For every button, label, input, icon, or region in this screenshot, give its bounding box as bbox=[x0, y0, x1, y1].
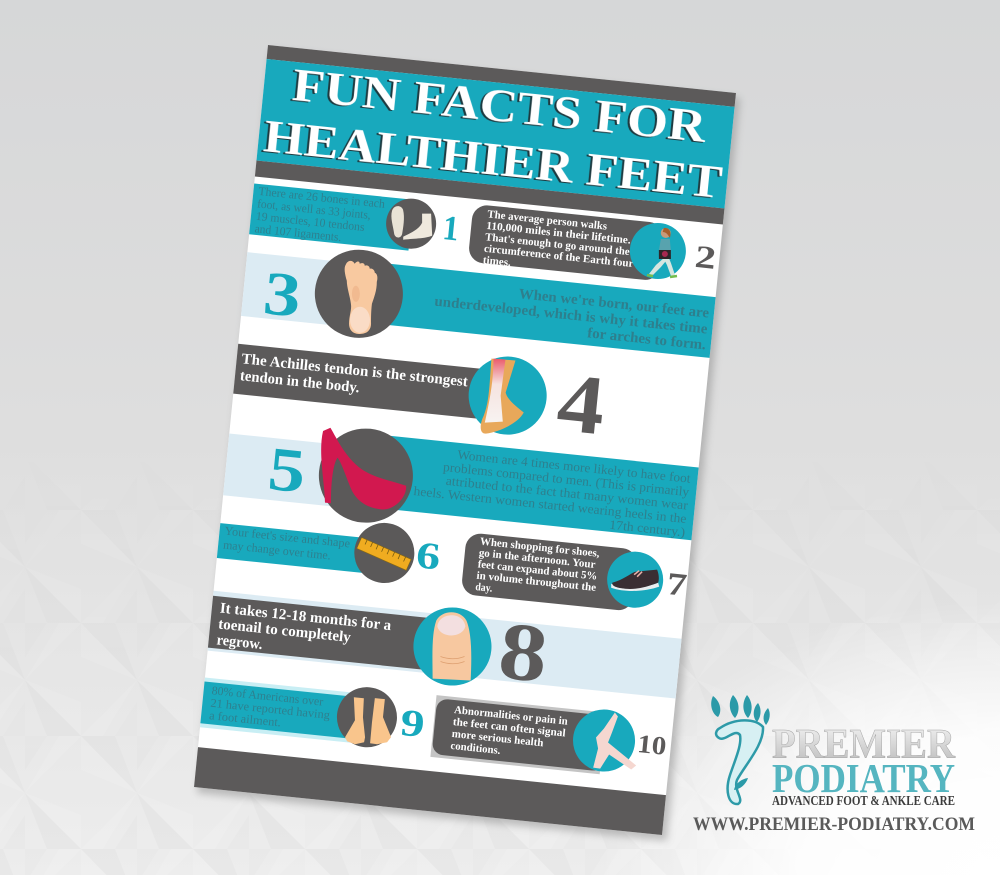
brand: podiatry: PODIATRY bbox=[772, 755, 955, 801]
fact 2: circumference of the Earth four bbox=[483, 243, 634, 270]
fact 5: Women are 4 times more likely to have foot bbox=[457, 447, 692, 486]
fact 1: There are 26 bones in each bbox=[258, 184, 386, 211]
fact 1: foot, as well as 33 joints, bbox=[257, 196, 371, 222]
footer band bbox=[194, 747, 666, 835]
fact 1: 19 muscles, 10 tendons bbox=[255, 209, 366, 234]
title: FUN FACTS FOR bbox=[290, 59, 710, 153]
icon: toenail bbox=[432, 612, 471, 681]
icon: foot sole bbox=[345, 261, 378, 334]
fact 5: attributed to the fact that many women wear bbox=[445, 473, 689, 513]
poster bbox=[194, 45, 736, 835]
fact 3 bbox=[240, 238, 717, 374]
icon: high heel bbox=[315, 427, 411, 512]
fact 8: It takes 12-18 months for a bbox=[219, 601, 392, 634]
title: HEALTHIER FEET bbox=[261, 110, 725, 209]
number 4: 4 bbox=[553, 356, 609, 453]
fact 3: When we're born, our feet are bbox=[518, 286, 710, 322]
fact 6: Your feet's size and shape bbox=[224, 524, 351, 550]
icon: ruler bbox=[357, 537, 411, 570]
fact 6 bbox=[216, 506, 443, 589]
fact 3: underdeveloped, which is why it takes time bbox=[434, 294, 709, 338]
fact 9: a foot ailment. bbox=[209, 708, 282, 729]
number 9: 9 bbox=[399, 702, 427, 746]
header band bbox=[255, 45, 736, 224]
fact 8: regrow. bbox=[216, 632, 264, 653]
icon: two feet bbox=[345, 697, 391, 744]
number 2: 2 bbox=[693, 238, 718, 276]
fact 5: problems compared to men. (This is primarily bbox=[443, 459, 690, 499]
number 5: 5 bbox=[265, 435, 309, 506]
fact 9: 80% of Americans over bbox=[211, 683, 324, 709]
fact 1 bbox=[249, 180, 462, 256]
fact 4: The Achilles tendon is the strongest bbox=[241, 351, 469, 390]
fact 7: When shopping for shoes, bbox=[479, 536, 600, 560]
fact 5 bbox=[222, 415, 699, 556]
fact 3: for arches to form. bbox=[586, 325, 707, 353]
fact 8 bbox=[206, 575, 683, 713]
logo bbox=[693, 695, 975, 835]
number 3: 3 bbox=[261, 259, 304, 331]
fact 7: feet can expand about 5% bbox=[477, 558, 598, 583]
title bbox=[261, 57, 730, 209]
fact 10: more serious health bbox=[451, 728, 544, 749]
icon: walking woman bbox=[630, 223, 686, 279]
fact 7: in volume throughout the bbox=[476, 570, 597, 594]
tagline: ADVANCED FOOT & ANKLE CARE bbox=[772, 794, 955, 809]
fact 2 bbox=[467, 201, 719, 290]
fact 2: 110,000 miles in their lifetime. bbox=[486, 220, 632, 247]
fact 1: and 107 ligaments. bbox=[254, 221, 342, 244]
fact 2: times. bbox=[482, 254, 512, 269]
icon: foot bones bbox=[386, 199, 436, 249]
brand: premier: PREMIER bbox=[772, 722, 956, 768]
fact 10: conditions. bbox=[450, 740, 501, 757]
icon: leaf foot bbox=[711, 695, 770, 804]
fact 2: The average person walks bbox=[487, 208, 608, 233]
number 1: 1 bbox=[441, 208, 461, 248]
number 10: 10 bbox=[636, 729, 668, 761]
icon: ankle and tendon bbox=[480, 358, 524, 434]
fact 4: tendon in the body. bbox=[239, 368, 361, 396]
fact 2: That's enough to go around the bbox=[485, 231, 630, 258]
fact 10 bbox=[430, 692, 669, 781]
number 6: 6 bbox=[414, 534, 442, 579]
icon: dress shoe bbox=[611, 570, 659, 591]
website: WWW.PREMIER-PODIATRY.COM bbox=[693, 814, 975, 835]
fact 10: Abnormalities or pain in bbox=[454, 704, 568, 728]
fact 9: 21 have reported having bbox=[210, 696, 331, 722]
fact 10: the feet can often signal bbox=[452, 716, 566, 740]
number 7: 7 bbox=[665, 565, 689, 603]
fact 7 bbox=[461, 532, 690, 617]
number 8: 8 bbox=[495, 605, 552, 700]
fact 5: 17th century.) bbox=[609, 517, 686, 539]
icon: legs bbox=[593, 712, 636, 770]
fact 6: may change over time. bbox=[223, 538, 331, 563]
fact 9 bbox=[200, 670, 428, 753]
fact 4 bbox=[231, 323, 609, 453]
fact 7: go in the afternoon. Your bbox=[478, 547, 596, 571]
fact 5: heels. Western women started wearing heels in the bbox=[413, 483, 687, 526]
fact 8: toenail to completely bbox=[217, 617, 352, 646]
poster shadow bbox=[197, 50, 740, 841]
fact 7: day. bbox=[475, 581, 493, 595]
